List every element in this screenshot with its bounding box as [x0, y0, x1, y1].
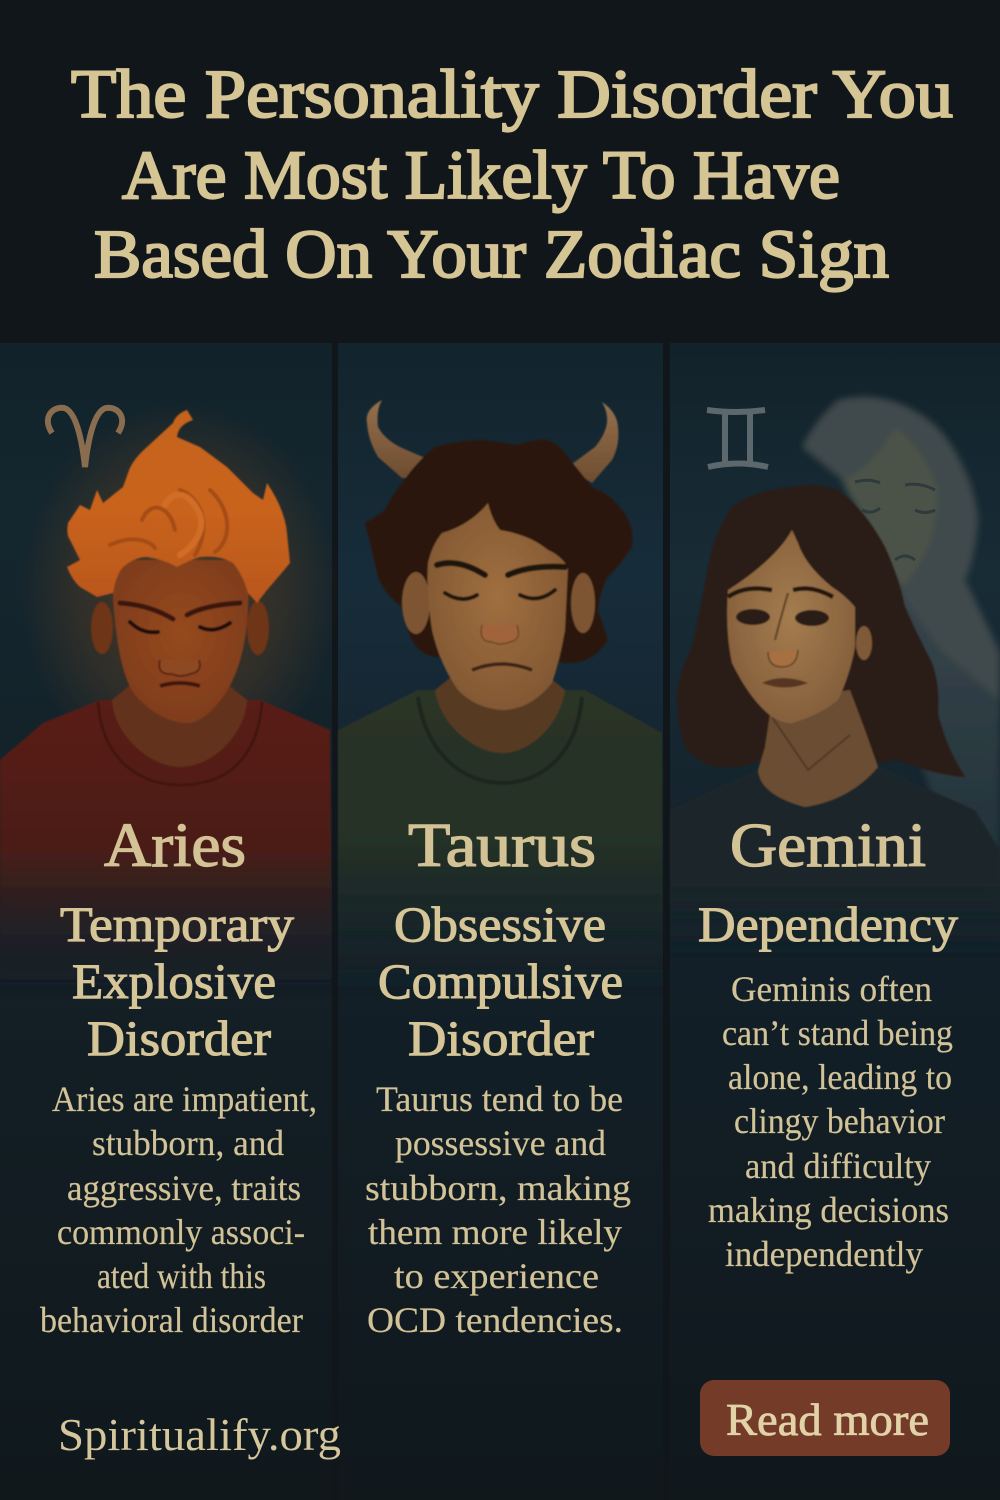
text: Gemini description: Geminis often [731, 969, 932, 1009]
disorder: Obsessive Compulsive Disorder: Obsessive [394, 896, 606, 952]
text: Aries description: Aries are impatient, [52, 1079, 317, 1119]
icon: ghost face details [855, 480, 935, 560]
button: Read more [700, 1380, 950, 1456]
face [428, 503, 568, 710]
shirt [338, 690, 663, 1000]
illustration: Taurus figure [338, 400, 663, 1000]
footer: site name: Spiritualify.org [58, 1409, 341, 1460]
panel: Aries [0, 343, 340, 1500]
panel: Taurus [338, 343, 663, 1500]
hair [365, 440, 633, 663]
text: Gemini description [708, 969, 953, 1274]
neck [758, 690, 878, 807]
icon: Aries symbol [48, 408, 122, 467]
ear [856, 626, 872, 660]
text: Gemini description: clingy behavior [734, 1101, 945, 1141]
disorder: Temporary Explosive Disorder: Temporary [60, 896, 294, 952]
text: Aries description: commonly associ- [57, 1212, 305, 1252]
text: Aries description: stubborn, and [92, 1123, 284, 1163]
button: Read more: Read more [726, 1394, 929, 1445]
hair [677, 485, 965, 777]
text: Taurus description: possessive and [395, 1123, 606, 1163]
horns [367, 400, 430, 478]
text: Taurus description: to experience [394, 1256, 599, 1296]
face [727, 530, 855, 723]
text: Aries description: ated with this [97, 1256, 266, 1296]
title: The Personality Disorder You [71, 56, 953, 132]
title [71, 56, 953, 292]
shirt [670, 767, 1000, 960]
text: Aries description [40, 1079, 317, 1340]
flame hair [67, 410, 290, 603]
illustration: Gemini figure [670, 485, 1000, 960]
disorder: Temporary Explosive Disorder: Disorder [87, 1010, 271, 1066]
shirt [0, 700, 332, 1000]
text: Taurus description: them more likely [368, 1212, 622, 1252]
disorder: Obsessive Compulsive Disorder [378, 896, 623, 1066]
heading: Aries: Aries [104, 812, 246, 880]
text: Gemini description: can’t stand being [722, 1013, 953, 1053]
disorder: Dependency: Dependency [698, 896, 958, 952]
face details [120, 603, 240, 619]
text: Taurus description: Taurus tend to be [376, 1079, 623, 1119]
disorder: Temporary Explosive Disorder [60, 896, 294, 1066]
heading: Gemini: Gemini [730, 812, 926, 880]
text: Gemini description: making decisions [708, 1190, 949, 1230]
text: Gemini description: alone, leading to [728, 1057, 952, 1097]
title: Are Most Likely To Have [122, 137, 840, 213]
heading: Taurus: Taurus [408, 812, 596, 880]
ears [91, 602, 113, 654]
text: Taurus description: stubborn, making [365, 1168, 631, 1208]
text: Aries description: aggressive, traits [67, 1168, 301, 1208]
title: Based On Your Zodiac Sign [94, 216, 889, 292]
neck [112, 680, 247, 767]
text: Taurus description: OCD tendencies. [367, 1300, 623, 1340]
icon: Gemini symbol [707, 410, 768, 467]
panel: Gemini [670, 343, 1000, 1500]
text: Gemini description: independently [725, 1234, 923, 1274]
text: Taurus description [365, 1079, 631, 1340]
disorder: Temporary Explosive Disorder: Explosive [72, 953, 276, 1009]
illustration: ghost figure [802, 397, 1000, 900]
neck [435, 670, 565, 753]
disorder: Obsessive Compulsive Disorder: Disorder [408, 1010, 594, 1066]
illustration: Aries figure [0, 410, 332, 1000]
disorder: Obsessive Compulsive Disorder: Compulsive [378, 953, 623, 1009]
text: Aries description: behavioral disorder [40, 1300, 303, 1340]
text: Gemini description: and difficulty [745, 1146, 931, 1186]
face [113, 560, 250, 723]
ears [402, 572, 430, 634]
